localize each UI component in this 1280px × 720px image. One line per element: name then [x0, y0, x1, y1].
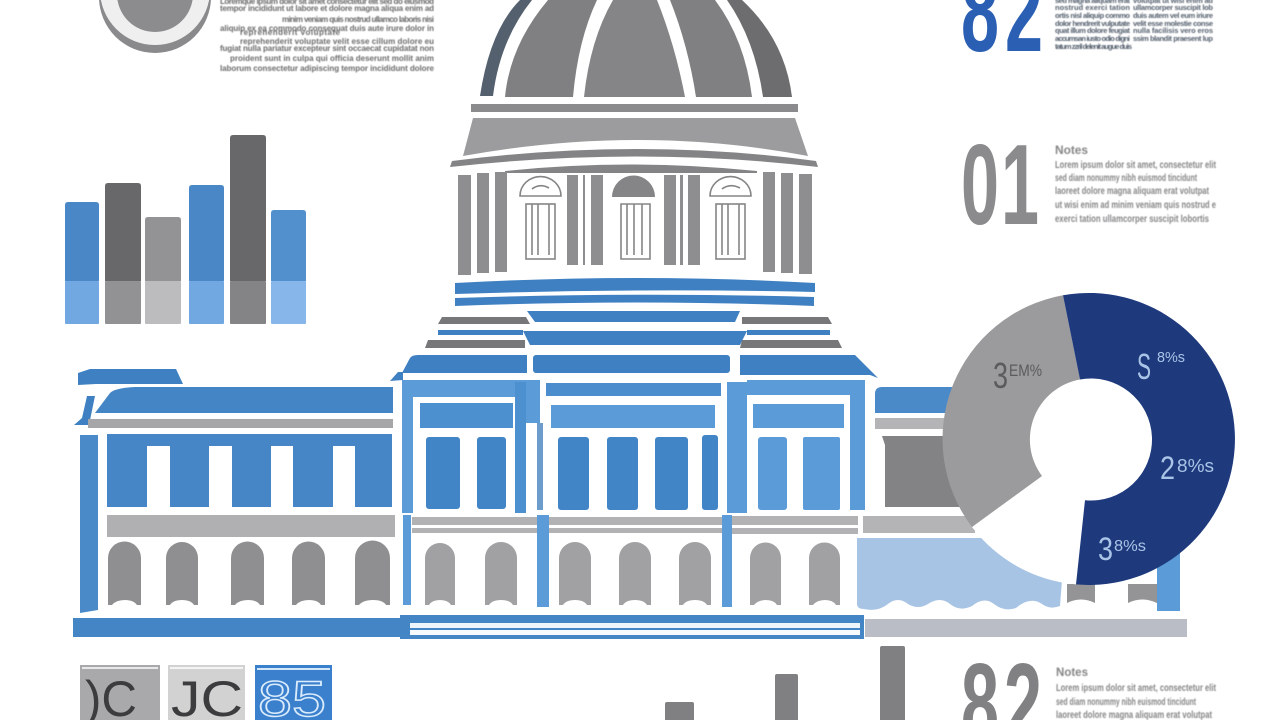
building base: [73, 615, 1187, 639]
text block: stat 01 description: laoreet dolore magna aliquam erat volutpat: [1055, 186, 1209, 197]
central arches: [425, 542, 840, 605]
text block: stat 01 description: Lorem ipsum dolor sit amet, consectetur elit: [1055, 160, 1217, 171]
gray terrace bands: [425, 317, 842, 348]
text block: top-left paragraph: tempor incididunt ut labore et dolore magna aliqua enim ad: [220, 4, 434, 13]
donut label: gray segment: 3: [993, 355, 1008, 396]
central roofs: [390, 355, 878, 381]
donut chart: EM%: [1009, 361, 1042, 380]
central pilasters: [403, 515, 732, 607]
bar chart: top-left: [65, 135, 306, 324]
donut label: top navy: S: [1137, 346, 1151, 387]
text block: top right two columns: [1055, 0, 1213, 51]
text block: top right two columns: dolor hendrerit vulputate: [1055, 19, 1130, 28]
blue drum base bands: [438, 278, 830, 345]
tile 3: [255, 665, 332, 720]
text block: stat 01 description: ut wisi enim ad minim veniam quis nostrud e: [1055, 200, 1216, 211]
text block: top right two columns: duis autem vel eum iriure: [1133, 11, 1213, 20]
tile 1: [80, 665, 160, 720]
capitol building illustration: [73, 0, 1187, 639]
stat: number 01: 1: [1001, 122, 1039, 249]
icon: top-left circle badge: [99, 0, 211, 53]
left wing: [74, 369, 395, 613]
text block: top right two columns: tatum zzril delenit augue duis: [1055, 42, 1132, 51]
text block: top right two columns: ullamcorper suscipit lob: [1133, 3, 1213, 12]
text block: top right two columns: ortis nisl aliquip commo: [1055, 11, 1130, 20]
text block: top-left paragraph: aliquip ex ea commodo consequat duis aute irure dolor in: [220, 24, 434, 33]
donut navy segment: [1063, 293, 1235, 585]
text block: top-left paragraph: [220, 0, 435, 73]
drum windows: [520, 175, 751, 259]
dome: [450, 0, 818, 173]
donut white gap wedge: [972, 476, 1085, 584]
text block: stat 01 description: exerci tation ullamcorper suscipit lobortis: [1055, 214, 1209, 225]
central facade blue frame: [402, 380, 865, 513]
text block: stat 01 description: sed diam nonummy nibh euismod tincidunt: [1055, 173, 1197, 184]
central windows: [426, 435, 840, 510]
donut chart: 8%s: [1157, 349, 1185, 366]
left wing arches: [108, 540, 390, 605]
text block: top right two columns: ssim blandit praesent lup: [1133, 34, 1213, 43]
icon tiles: bottom-left: [80, 665, 332, 720]
donut label: mid navy: 2: [1160, 450, 1175, 486]
bar chart: bottom: [665, 646, 905, 720]
text block: top-left paragraph: laborum consectetur adipiscing tempor incididunt dolore: [220, 64, 435, 73]
text block: top right two columns: quat illum dolore feugiat: [1055, 26, 1130, 35]
text block: stat 01 description: [1055, 143, 1217, 225]
drum columns: [458, 172, 812, 275]
text block: top-left paragraph: fugiat nulla pariatur excepteur sint occaecat cupidatat non: [220, 44, 434, 53]
text block: top right two columns: velit esse molestie conse: [1133, 19, 1213, 28]
text block: stat 01 description: Notes: [1055, 143, 1088, 157]
text block: bottom right description: [1056, 665, 1217, 720]
text block: top right two columns: nulla facilisis vero eros: [1133, 26, 1213, 35]
text block: top right two columns: nostrud exerci tation: [1055, 3, 1130, 12]
donut label: low navy: 3: [1098, 531, 1113, 567]
right wing: [857, 387, 1180, 611]
donut chart: [943, 293, 1235, 585]
text block: top-left paragraph: minim veniam quis nostrud ullamco laboris nisi: [282, 15, 434, 24]
text block: top-left paragraph: reprehenderit voluptate: [240, 28, 341, 37]
text block: top-left paragraph: proident sunt in culpa qui officia deserunt mollit anim: [230, 54, 434, 63]
text block: bottom right description: Notes: [1056, 665, 1088, 679]
donut chart: 8%s: [1114, 538, 1146, 555]
text block: top-left paragraph: reprehenderit voluptate velit esse cillum dolore eu: [240, 37, 434, 46]
text block: bottom right description: sed diam nonummy nibh euismod tincidunt: [1056, 697, 1196, 708]
donut gray segment: [943, 295, 1080, 527]
stat: number 01: 0: [961, 122, 999, 249]
donut chart: 8%s: [1177, 456, 1214, 476]
central lower cornice: [412, 516, 858, 534]
text block: top right two columns: accumsan iusto odio digni: [1055, 34, 1130, 43]
text block: bottom right description: Lorem ipsum dolor sit amet, consectetur elit: [1056, 683, 1217, 694]
